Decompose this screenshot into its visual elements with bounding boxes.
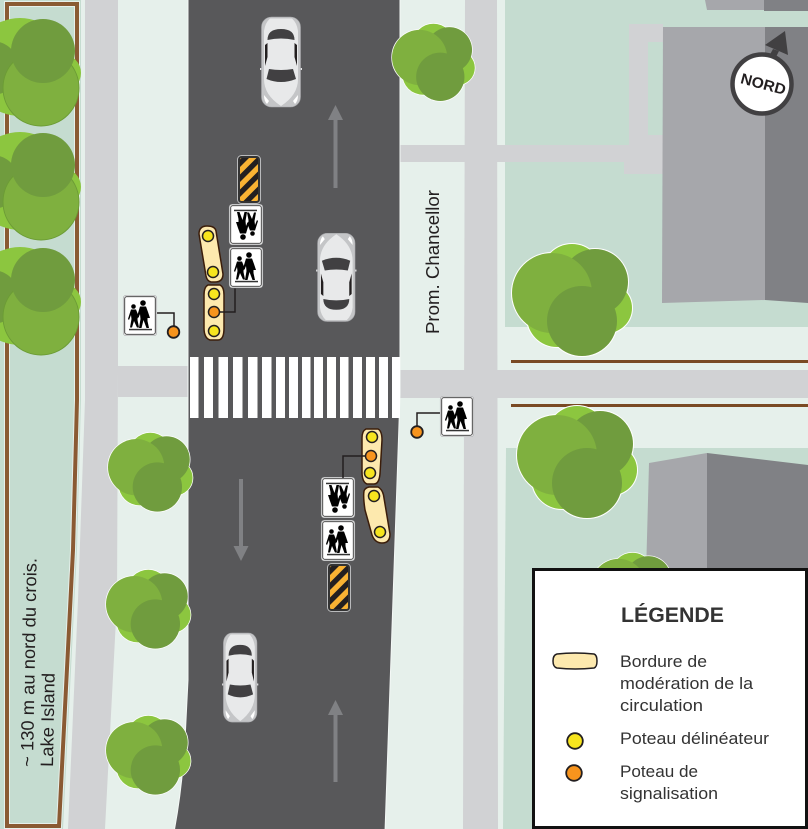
curb with post bbox=[204, 285, 235, 340]
brown line north bbox=[511, 360, 808, 363]
legend text: signal post: Poteau de bbox=[620, 762, 698, 781]
street label: Prom. Chancellor bbox=[423, 190, 443, 334]
legend title: LÉGENDE bbox=[621, 604, 724, 627]
car: top bbox=[260, 17, 302, 107]
tree: west boulevard 1 bbox=[108, 433, 193, 512]
panel: right lawn north bbox=[505, 0, 808, 327]
legend text: curb: circulation bbox=[620, 696, 703, 715]
building: small north bbox=[705, 0, 808, 11]
hazard board bbox=[328, 564, 350, 612]
icon: north compass: NORD bbox=[739, 70, 788, 99]
south-east traffic group bbox=[321, 429, 390, 612]
tree: west boulevard 3 bbox=[106, 716, 191, 795]
panel: walkway to building bbox=[400, 24, 663, 174]
sign post: west sidewalk bbox=[123, 295, 179, 338]
sign upright bbox=[321, 520, 355, 561]
tree: south lawn bbox=[517, 406, 637, 518]
tree: west boulevard 2 bbox=[106, 570, 191, 649]
car: middle bbox=[316, 233, 356, 322]
panel: right sidewalk bbox=[463, 0, 498, 829]
panel: left sidewalk bbox=[68, 0, 118, 829]
arrow: down south lane bbox=[234, 479, 248, 561]
arrow: up north lane bbox=[328, 105, 343, 188]
legend icon: signal post bbox=[566, 765, 582, 781]
tree: left strip 1 bbox=[0, 18, 81, 126]
tree: left strip 2 bbox=[0, 132, 81, 240]
note label line 1: ~ 130 m au nord du crois. bbox=[17, 558, 41, 767]
panel: right lawn south bbox=[503, 448, 808, 829]
panel: cross street east bbox=[398, 370, 808, 398]
sign post: east sidewalk bbox=[411, 396, 474, 438]
hazard board bbox=[238, 156, 260, 204]
road bbox=[174, 0, 400, 829]
panel: left green strip bbox=[0, 0, 81, 829]
icon: north compass bbox=[732, 31, 792, 114]
north-west traffic group bbox=[199, 156, 263, 340]
legend icon: delineator bbox=[567, 733, 583, 749]
building: north east bbox=[662, 27, 808, 303]
tree: left strip 3 bbox=[0, 247, 81, 355]
panel: left cross path bbox=[118, 366, 190, 397]
brown line south bbox=[511, 404, 808, 407]
tree: behind legend bbox=[591, 553, 674, 630]
note label line 2: Lake Island bbox=[37, 673, 59, 767]
arrow: up south lane bbox=[328, 700, 343, 782]
sign upside down bbox=[229, 204, 263, 245]
legend text: signal post: signalisation bbox=[620, 784, 718, 803]
brown fence frame bbox=[7, 4, 77, 826]
legend text: curb: modération de la bbox=[620, 674, 754, 693]
curb with two delineators bbox=[364, 487, 390, 543]
crosswalk bbox=[190, 357, 400, 418]
curb with post bbox=[343, 429, 382, 484]
building: south east bbox=[646, 453, 808, 575]
sign upside down bbox=[321, 477, 355, 518]
legend icon: curb bbox=[553, 653, 597, 669]
legend text: delineator: Poteau délinéateur bbox=[620, 729, 769, 748]
tree: east boulevard bbox=[392, 24, 475, 101]
car: bottom bbox=[222, 633, 258, 722]
sign upright bbox=[229, 247, 263, 288]
panel: legend bbox=[534, 570, 806, 828]
tree: north lawn bbox=[512, 244, 632, 356]
curb with two delineators bbox=[199, 226, 223, 282]
legend text: curb: Bordure de bbox=[620, 652, 707, 671]
